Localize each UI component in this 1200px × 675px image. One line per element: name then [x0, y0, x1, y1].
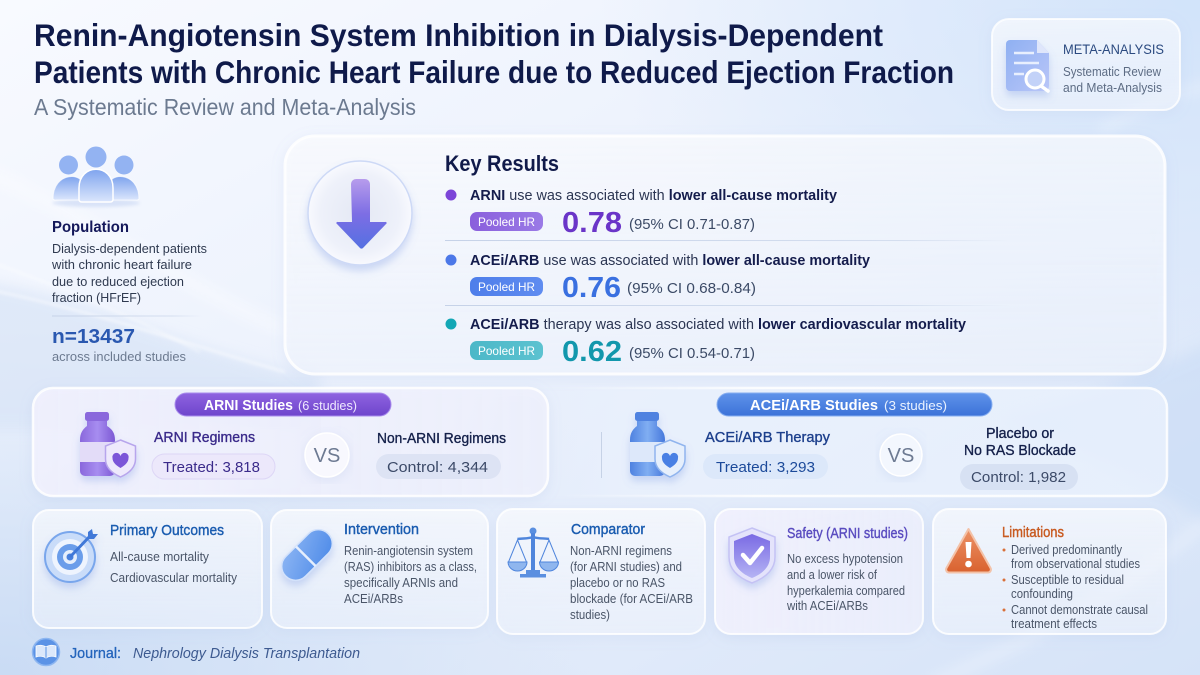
label: non-ARNI regimens: Non-ARNI Regimens — [377, 431, 506, 447]
population description: Dialysis-dependent patients — [52, 241, 207, 256]
limitations list: Cannot demonstrate causal — [1011, 602, 1148, 617]
limitations list: treatment effects — [1011, 616, 1097, 631]
stat: control: Control: 1,982 — [971, 470, 1066, 486]
comparator description: blockade (for ACEi/ARB — [570, 591, 693, 606]
badge description: and Meta-Analysis — [1063, 81, 1162, 95]
stat: treated — [703, 454, 828, 479]
label: placebo or no RAS blockade — [964, 426, 1076, 459]
sample size: n=13437 — [52, 326, 135, 348]
comparator description: Non-ARNI regimens — [570, 543, 672, 558]
result: ACEi/ARB cardiovascular mortality — [446, 316, 967, 368]
panel: population — [51, 146, 207, 364]
comparator description: (for ARNI studies) and — [570, 559, 682, 574]
result: ACEi/ARB all-cause mortality: ACEi/ARB use was associated with lower all-cause mortality — [470, 252, 871, 269]
heading: comparator: Comparator — [571, 521, 645, 538]
stat: treated: Treated: 3,293 — [716, 460, 815, 476]
result: ACEi/ARB cardiovascular mortality: ACEi/ARB therapy was also associated with lower cardiovascular mortality — [470, 316, 967, 333]
vs marker — [305, 433, 349, 477]
result: ACEi/ARB all-cause mortality: Pooled HR — [478, 280, 535, 294]
stat: control: Control: 4,344 — [387, 460, 488, 476]
heading: ARNI studies: (6 studies) — [298, 398, 357, 413]
safety description: and a lower risk of — [787, 567, 877, 582]
card: primary outcomes — [33, 510, 262, 628]
limitations list — [1002, 542, 1148, 631]
card: safety — [715, 509, 923, 634]
label: ACEi/ARB therapy: ACEi/ARB Therapy — [705, 430, 831, 446]
heading: limitations: Limitations — [1002, 524, 1064, 541]
journal name: Nephrology Dialysis Transplantation — [133, 645, 360, 662]
population description: fraction (HFrEF) — [52, 290, 141, 305]
icon: document with magnifier — [1006, 40, 1049, 91]
result: ACEi/ARB cardiovascular mortality: (95% CI 0.54-0.71) — [629, 346, 755, 362]
icon: capsule — [276, 524, 338, 586]
comparator description — [570, 543, 693, 622]
safety description — [786, 551, 905, 613]
vs marker: VS — [314, 445, 340, 467]
vs marker — [880, 434, 922, 476]
result: ACEi/ARB cardiovascular mortality: Pooled HR — [478, 344, 535, 358]
heading: ACEi/ARB studies: ACEi/ARB Studies — [750, 398, 878, 414]
title: Renin-Angiotensin System Inhibition in Dialysis-Dependent — [34, 17, 883, 53]
label: placebo or no RAS blockade: Placebo or — [986, 426, 1054, 442]
result: ARNI all-cause mortality — [446, 187, 838, 239]
title: Patients with Chronic Heart Failure due to Reduced Ejection Fraction — [34, 54, 954, 90]
population description: due to reduced ejection — [52, 274, 184, 289]
stat: control — [376, 454, 501, 479]
safety description: with ACEi/ARBs — [786, 598, 868, 613]
icon: balance scale — [508, 528, 558, 578]
card: limitations — [933, 509, 1166, 634]
panel: ACEi/ARB studies — [548, 388, 1167, 496]
intervention description — [344, 543, 477, 606]
result: ACEi/ARB all-cause mortality — [446, 252, 871, 304]
icon: warning triangle — [946, 529, 991, 572]
badge description: Systematic Review — [1063, 65, 1162, 79]
limitations list: Susceptible to residual — [1011, 572, 1124, 587]
outcomes list: Cardiovascular mortality — [110, 570, 237, 585]
limitations list: from observational studies — [1011, 556, 1140, 571]
intervention description: (RAS) inhibitors as a class, — [344, 559, 477, 574]
vs marker: VS — [888, 445, 914, 467]
card: intervention — [271, 510, 488, 628]
population description — [51, 241, 207, 305]
heading: ARNI studies: ARNI Studies — [204, 398, 293, 414]
badge: meta-analysis — [992, 19, 1180, 110]
stat: treated — [152, 454, 275, 479]
intervention description: specifically ARNIs and — [344, 575, 458, 590]
icon: open book — [32, 638, 60, 666]
icon: down arrow — [308, 161, 412, 265]
outcomes list: All-cause mortality — [110, 549, 209, 564]
intervention description: ACEi/ARBs — [344, 591, 403, 606]
heading: ACEi/ARB studies: (3 studies) — [884, 398, 947, 413]
safety description: No excess hypotension — [787, 551, 903, 566]
subtitle: A Systematic Review and Meta-Analysis — [34, 94, 416, 120]
heading: ACEi/ARB studies — [717, 393, 992, 416]
result: ACEi/ARB cardiovascular mortality: 0.62 — [562, 336, 622, 368]
journal label: Journal: — [70, 645, 121, 662]
result: ARNI all-cause mortality: Pooled HR — [478, 215, 535, 229]
icon: blue bottle with shield — [630, 412, 685, 477]
badge description — [1063, 65, 1162, 95]
stat: control — [960, 464, 1078, 490]
heading: population: Population — [52, 219, 129, 236]
result: ACEi/ARB all-cause mortality: (95% CI 0.68-0.84) — [627, 281, 756, 297]
safety description: hyperkalemia compared — [787, 583, 905, 598]
icon: shield with check — [729, 528, 775, 583]
result: ARNI all-cause mortality: 0.78 — [562, 207, 622, 239]
heading: primary outcomes: Primary Outcomes — [110, 522, 224, 539]
icon: people group — [52, 146, 140, 207]
stat: treated: Treated: 3,818 — [163, 460, 260, 476]
heading: safety: Safety (ARNI studies) — [787, 525, 908, 542]
panel: ARNI studies — [33, 388, 548, 496]
population description: with chronic heart failure — [51, 257, 192, 272]
icon: purple bottle with shield — [80, 412, 136, 477]
limitations list: confounding — [1011, 586, 1073, 601]
card: comparator — [497, 509, 705, 634]
limitations list: Derived predominantly — [1011, 542, 1122, 557]
intervention description: Renin-angiotensin system — [344, 543, 473, 558]
sample size caption: across included studies — [52, 349, 186, 364]
panel: key results — [285, 136, 1165, 374]
outcomes list — [110, 549, 237, 585]
label: ARNI regimens: ARNI Regimens — [154, 430, 255, 446]
comparator description: studies) — [570, 607, 610, 622]
comparator description: placebo or no RAS — [570, 575, 665, 590]
result: ARNI all-cause mortality: ARNI use was associated with lower all-cause mortality — [470, 187, 838, 204]
icon: target — [45, 529, 98, 582]
result: ARNI all-cause mortality: (95% CI 0.71-0.87) — [629, 217, 755, 233]
journal footer — [32, 638, 360, 666]
label: placebo or no RAS blockade: No RAS Blockade — [964, 443, 1076, 459]
heading: ARNI studies — [175, 393, 391, 416]
heading: key results: Key Results — [445, 151, 559, 176]
heading: intervention: Intervention — [344, 521, 419, 538]
badge label: META-ANALYSIS — [1063, 42, 1164, 57]
title — [34, 17, 954, 90]
result: ACEi/ARB all-cause mortality: 0.76 — [562, 272, 621, 304]
